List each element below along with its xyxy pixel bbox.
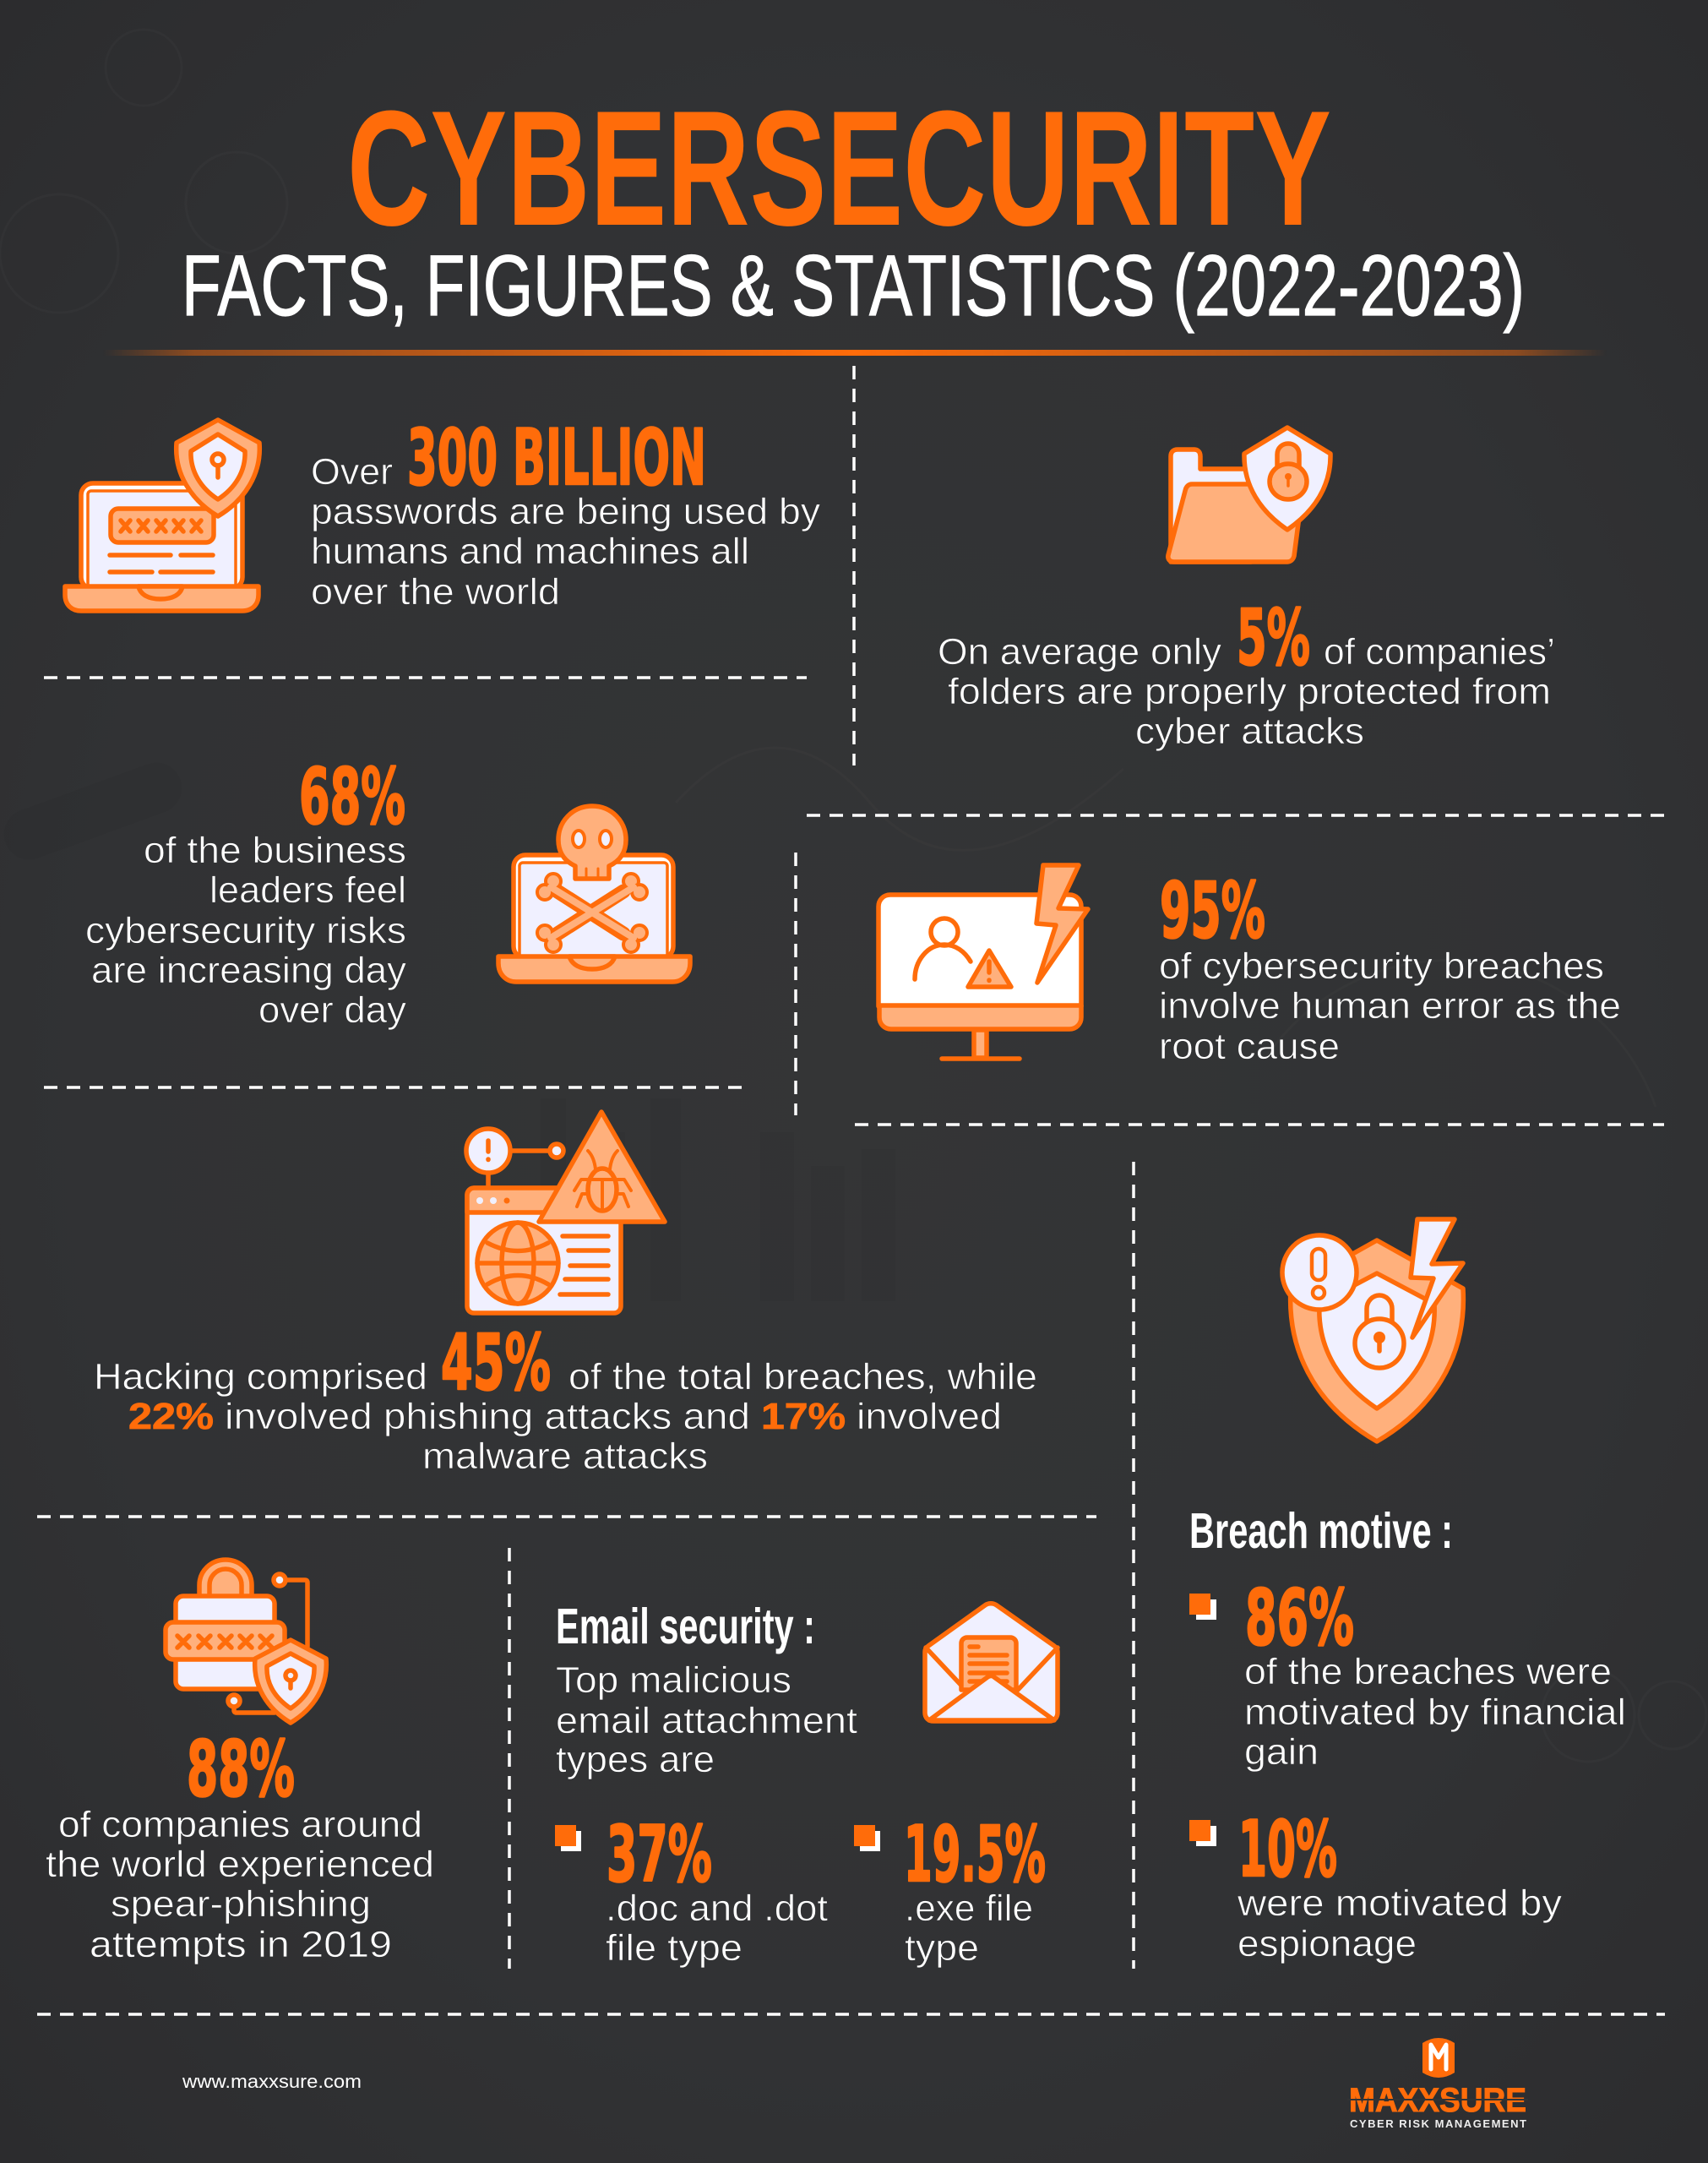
stat: hacking, phishing and malware shares: 22%	[128, 1396, 214, 1437]
bullet: espionage	[1189, 1806, 1562, 1964]
stat: hacking, phishing and malware shares: involved	[857, 1396, 1002, 1437]
bullet: financial gain: motivated by financial	[1244, 1692, 1626, 1733]
icon: browser window with globe and bug warning	[466, 1112, 665, 1313]
title: CYBERSECURITY	[347, 77, 1331, 260]
stat: 68% of business leaders: 68%	[299, 753, 405, 842]
text: attachment intro: email attachment	[556, 1700, 857, 1741]
stat: 68% of business leaders: over day	[258, 989, 406, 1031]
stat: 5% of folders protected: folders are properly protected from	[948, 671, 1551, 712]
text: attachment intro	[556, 1659, 857, 1780]
stat: 95% human error: 95%	[1160, 867, 1265, 956]
stat: 300 billion passwords: humans and machines all	[311, 531, 749, 572]
stat: hacking, phishing and malware shares: 45%	[441, 1319, 551, 1408]
stat: 68% of business leaders	[85, 753, 406, 1031]
bullet: .doc and .dot: 37%	[607, 1811, 712, 1899]
stat: 68% of business leaders: are increasing day	[91, 950, 406, 991]
heading: breach motive: Breach motive :	[1189, 1503, 1453, 1559]
stat: 5% of folders protected	[938, 594, 1555, 752]
stat: 95% human error: involve human error as the	[1159, 985, 1621, 1027]
panel: email security	[555, 1599, 1058, 1969]
text: attachment intro: types are	[556, 1739, 715, 1780]
logo tagline: CYBER RISK MANAGEMENT	[1350, 2117, 1526, 2130]
stat: 5% of folders protected: cyber attacks	[1135, 711, 1364, 752]
bullet: financial gain: gain	[1244, 1731, 1319, 1773]
bullet: .exe: type	[905, 1927, 979, 1969]
bullet: .doc and .dot	[555, 1811, 828, 1969]
icon: open envelope	[925, 1604, 1058, 1721]
stat: 88% spear-phishing: attempts in 2019	[90, 1924, 392, 1965]
bullet: espionage: were motivated by	[1237, 1882, 1562, 1924]
stat: 5% of folders protected: 5%	[1237, 594, 1310, 683]
stat: 300 billion passwords	[311, 414, 820, 613]
logo badge	[1422, 2038, 1455, 2078]
logo wordmark: MAXXSURE	[1349, 2082, 1526, 2119]
stat: 300 billion passwords: Over	[311, 451, 393, 493]
icon: shield with lock, alert and bolt	[1282, 1219, 1463, 1441]
icon: monitor with user warning and lightning bolt	[878, 865, 1088, 1059]
stat: hacking, phishing and malware shares	[94, 1319, 1037, 1477]
stat: 95% human error: root cause	[1159, 1026, 1340, 1067]
stat: hacking, phishing and malware shares: of the total breaches, while	[568, 1356, 1037, 1398]
stat: 88% spear-phishing: the world experienced	[46, 1844, 434, 1885]
panel: breach motive	[1189, 1503, 1626, 1964]
text: attachment intro: Top malicious	[556, 1659, 791, 1701]
bullet: financial gain	[1189, 1574, 1626, 1773]
bullet: .doc and .dot: .doc and .dot	[606, 1888, 828, 1929]
stat: 300 billion passwords: 300 BILLION	[407, 414, 706, 503]
stat: 300 billion passwords: passwords are being used by	[311, 491, 820, 532]
stat: 300 billion passwords: over the world	[311, 571, 560, 613]
stat: 68% of business leaders: leaders feel	[209, 869, 406, 911]
stat: 68% of business leaders: of the business	[144, 830, 406, 871]
bullet: financial gain: of the breaches were	[1244, 1651, 1612, 1692]
bullet: espionage: 10%	[1238, 1806, 1337, 1894]
stat: hacking, phishing and malware shares: Hacking comprised	[94, 1356, 427, 1398]
bullet: .doc and .dot: file type	[606, 1927, 742, 1969]
stat: hacking, phishing and malware shares: involved phishing attacks and	[225, 1396, 750, 1437]
stat: 88% spear-phishing: 88%	[187, 1725, 295, 1814]
bullet: financial gain: 86%	[1245, 1574, 1354, 1663]
stat: 88% spear-phishing: spear-phishing	[111, 1883, 371, 1925]
stat: 68% of business leaders: cybersecurity risks	[85, 910, 406, 951]
bullet: espionage: espionage	[1237, 1923, 1417, 1964]
icon: padlock with password and shield	[166, 1560, 326, 1723]
bullet: .exe: .exe file	[905, 1888, 1033, 1929]
icon: laptop with password and shield	[65, 420, 259, 611]
stat: 5% of folders protected: of companies’	[1324, 631, 1555, 673]
stat: 88% spear-phishing: of companies around	[58, 1804, 422, 1845]
stat: 95% human error: of cybersecurity breaches	[1159, 945, 1604, 987]
stat: 88% spear-phishing	[46, 1725, 434, 1965]
bullet: .exe: 19.5%	[904, 1811, 1046, 1899]
bullet: .exe	[854, 1811, 1046, 1969]
stat: hacking, phishing and malware shares: 17%	[761, 1396, 846, 1437]
footer url: www.maxxsure.com	[182, 2071, 362, 2092]
stat: 5% of folders protected: On average only	[938, 631, 1221, 673]
stat: 95% human error	[1159, 867, 1621, 1067]
heading: email security: Email security :	[556, 1599, 815, 1654]
icon: folder with shield lock	[1168, 428, 1330, 562]
icon: laptop with skull and crossbones	[498, 806, 690, 982]
stat: hacking, phishing and malware shares: malware attacks	[422, 1436, 708, 1477]
logo: Maxxsure	[1347, 2038, 1528, 2130]
